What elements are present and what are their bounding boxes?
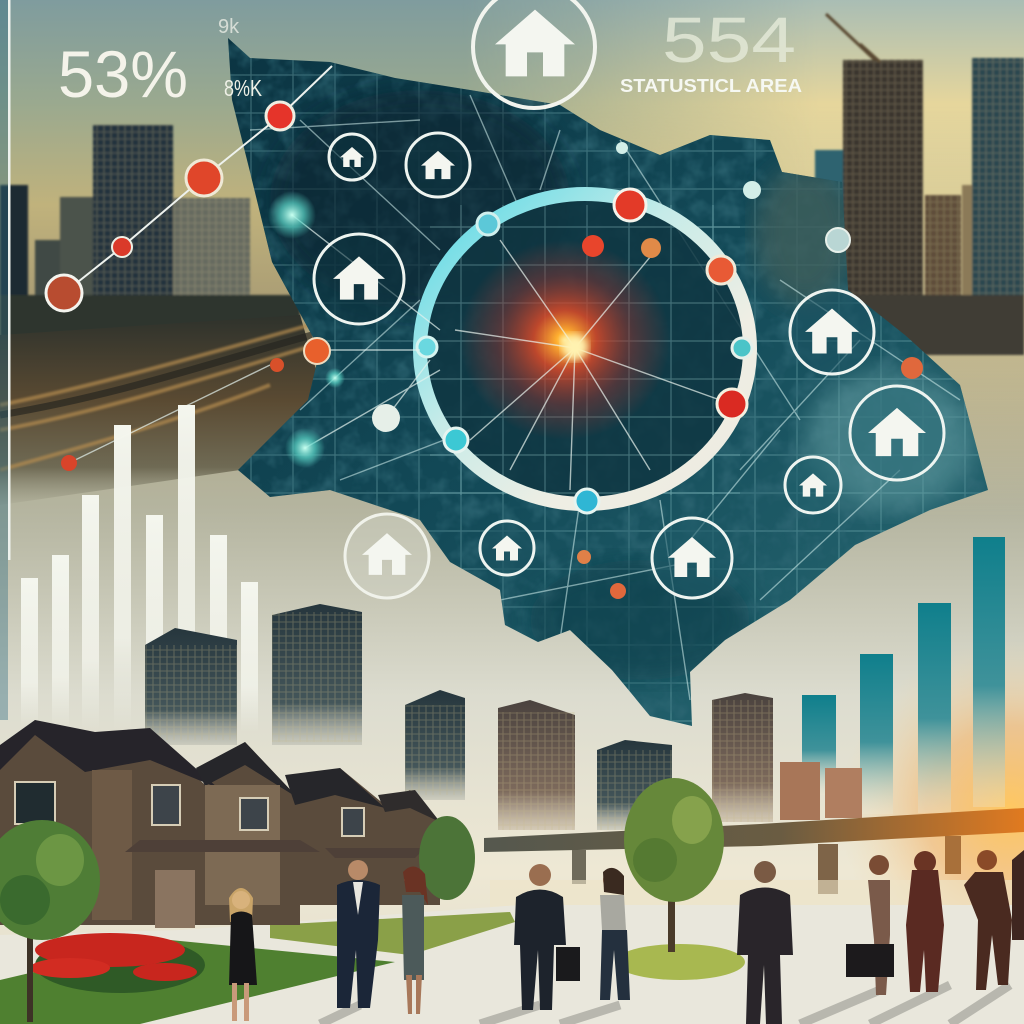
left axis line xyxy=(8,0,10,560)
target ring xyxy=(420,194,750,504)
icon: emblem xyxy=(329,134,375,180)
trend line with red nodes xyxy=(46,66,332,311)
icon: house lower left xyxy=(345,514,429,598)
person: man from behind xyxy=(737,861,793,1024)
bridge xyxy=(484,808,1024,894)
icon: house right xyxy=(790,290,874,374)
person: woman in black dress xyxy=(229,888,257,1021)
tree centre xyxy=(624,778,724,952)
ground xyxy=(0,905,1024,1024)
tree left xyxy=(0,820,100,1022)
person: man with briefcase xyxy=(514,864,580,1010)
white bar chart left xyxy=(21,405,258,732)
icon: house lower right xyxy=(652,518,732,598)
statistic: 53%: 53% xyxy=(58,37,188,111)
icon: house xyxy=(406,133,470,197)
person: man in navy suit xyxy=(337,860,380,1008)
skyline: upper right towers xyxy=(815,14,1024,355)
skyline: upper left towers xyxy=(0,125,300,340)
mid-ground towers xyxy=(145,604,862,830)
tree behind houses xyxy=(419,816,475,900)
icon: small right xyxy=(785,457,841,513)
map of statistical area xyxy=(220,30,1000,730)
person: silhouette right xyxy=(964,850,1012,990)
river and lower haze xyxy=(490,880,1024,915)
person: woman in teal skirt xyxy=(402,866,428,1014)
icon: house top xyxy=(473,0,595,108)
statistic: 8K: 8%K xyxy=(224,75,263,101)
person: woman with phone xyxy=(600,868,630,1000)
person: edge figure xyxy=(1012,850,1024,940)
flower bed xyxy=(30,933,205,993)
icon: lower centre xyxy=(480,521,534,575)
icon: houses left xyxy=(314,234,404,324)
statistic: 554: 554 xyxy=(662,4,796,76)
icon: house far right xyxy=(850,386,944,480)
highway band xyxy=(0,315,325,505)
statistic: small figure top: 9k xyxy=(218,16,240,38)
ring markers xyxy=(417,189,752,513)
houses xyxy=(0,720,440,928)
person: silhouette in red xyxy=(906,851,944,992)
connector lines and floating nodes xyxy=(61,142,923,599)
heat centre with radial street grid xyxy=(423,198,747,502)
person: silhouette with bag xyxy=(846,855,894,995)
label: statistical area: STATUSTICL AREA xyxy=(620,76,802,96)
teal bar chart right xyxy=(802,537,1005,814)
